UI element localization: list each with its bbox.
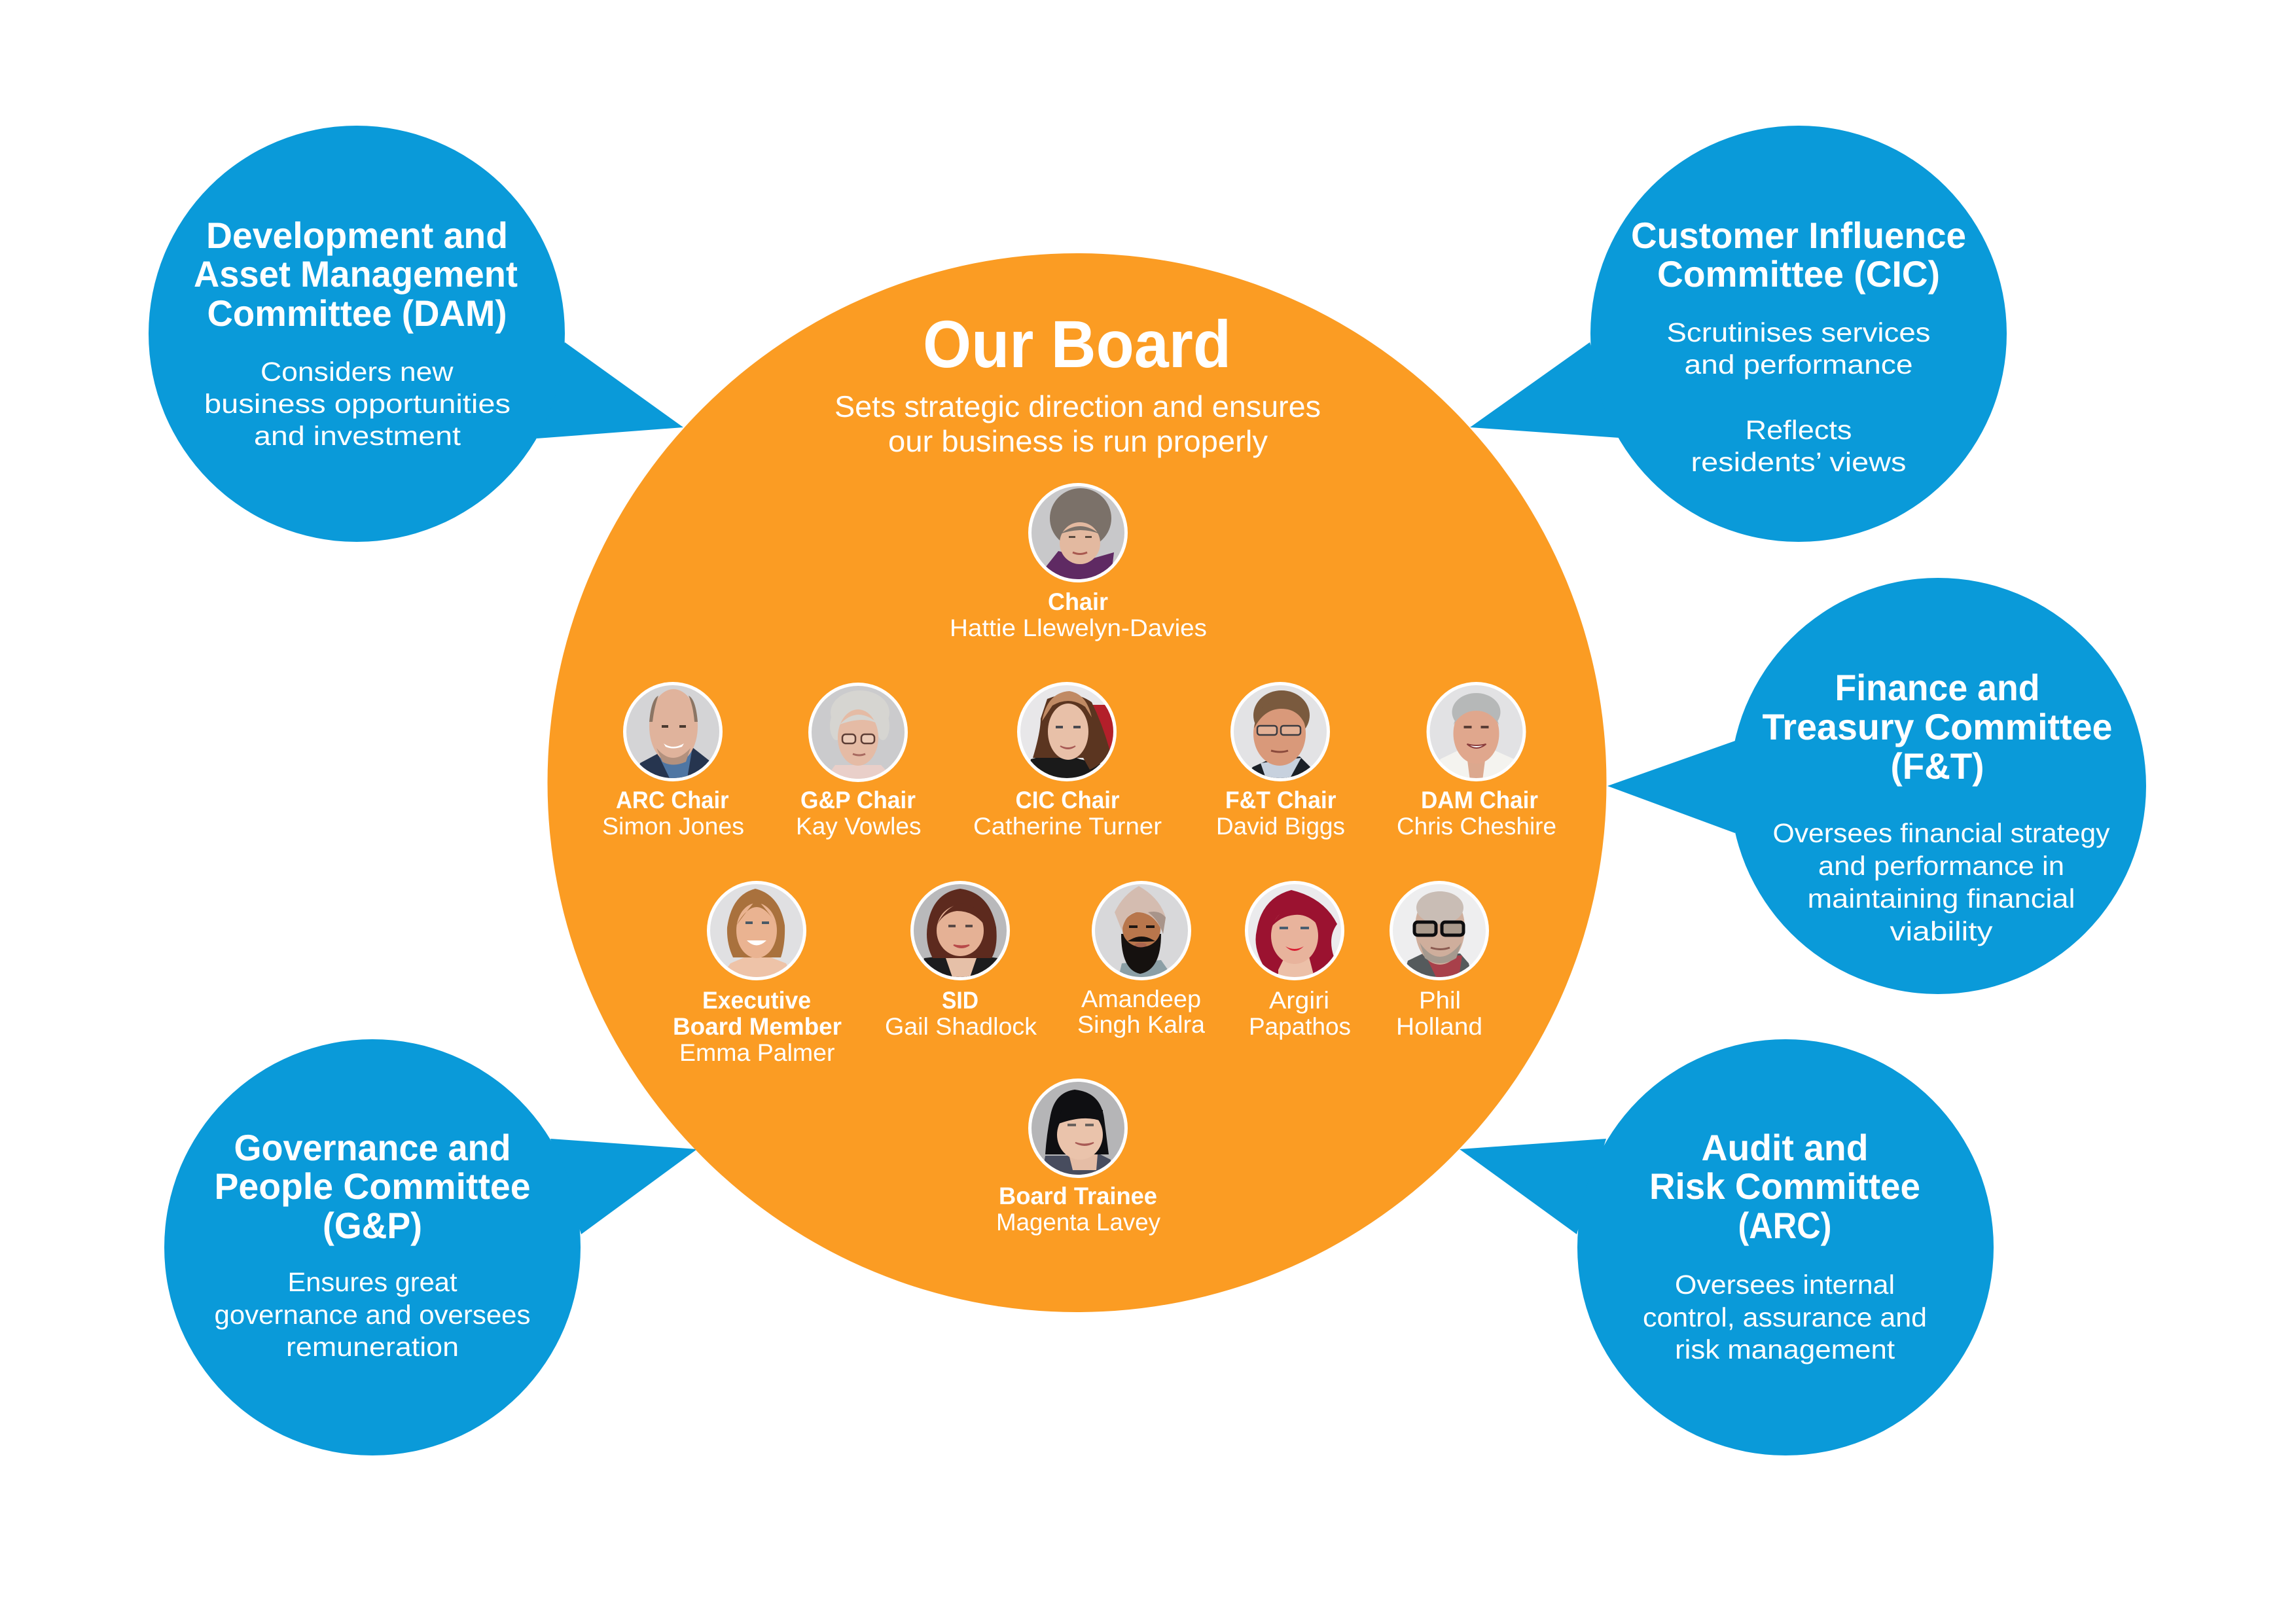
- label: G&P chair: G&P Chair: [800, 787, 916, 813]
- text: ARC description: Oversees internal: [1675, 1270, 1895, 1300]
- text: F&T description: and performance in: [1818, 851, 2064, 881]
- icon: portrait Hattie Llewelyn-Davies: [1028, 483, 1128, 582]
- text: F&T description: maintaining financial: [1808, 883, 2075, 914]
- icon: portrait Emma Palmer: [707, 881, 806, 980]
- member: CIC chair: [973, 682, 1162, 840]
- member: chair: [950, 483, 1207, 641]
- label: SID: [885, 987, 1037, 1040]
- text: F&T description: [1772, 818, 2110, 946]
- text: CIC description: [1666, 317, 1931, 477]
- label: G&P chair: Kay Vowles: [796, 813, 922, 840]
- heading: CIC: Customer Influence: [1631, 215, 1966, 256]
- member: Phil Holland: [1390, 881, 1489, 1040]
- label: ARC chair: [602, 787, 744, 840]
- text: DAM description: and investment: [254, 421, 461, 451]
- heading: G&P: People Committee: [215, 1166, 530, 1207]
- subtitle: our business is run properly: [888, 424, 1268, 458]
- panel: development and asset management committee: [149, 126, 683, 542]
- member: board trainee: [996, 1079, 1160, 1236]
- label: Argiri Papathos: [1249, 987, 1351, 1040]
- label: DAM chair: Chris Cheshire: [1397, 813, 1556, 840]
- label: chair: [950, 588, 1207, 641]
- label: executive board member: [673, 987, 842, 1066]
- heading: G&P: [215, 1127, 530, 1246]
- icon: portrait Simon Jones: [623, 682, 723, 781]
- label: F&T chair: David Biggs: [1216, 813, 1345, 840]
- heading: F&T: [1762, 667, 2113, 787]
- icon: portrait Catherine Turner: [1017, 682, 1117, 781]
- title: Our Board: [923, 307, 1231, 382]
- member: Amandeep Singh Kalra: [1077, 881, 1205, 1038]
- label: ARC chair: ARC Chair: [616, 787, 729, 813]
- icon: portrait Kay Vowles: [808, 683, 908, 782]
- text: CIC description: and performance: [1685, 349, 1912, 380]
- text: ARC description: risk management: [1675, 1334, 1895, 1364]
- label: executive board member: Emma Palmer: [679, 1039, 835, 1066]
- text: G&P description: [215, 1267, 530, 1362]
- panel: governance and people committee: [164, 1039, 697, 1455]
- label: Argiri Papathos: Argiri: [1269, 987, 1329, 1014]
- label: board trainee: Board Trainee: [999, 1183, 1157, 1209]
- heading: CIC: [1631, 215, 1966, 294]
- heading: DAM: Development and: [206, 215, 508, 256]
- text: G&P description: governance and oversees: [215, 1300, 530, 1330]
- label: executive board member: Executive: [702, 987, 811, 1014]
- text: F&T description: Oversees financial strategy: [1772, 818, 2110, 848]
- label: chair: Chair: [1048, 588, 1108, 615]
- text: DAM description: [204, 357, 511, 451]
- text: CIC description: Reflects: [1745, 415, 1852, 445]
- heading: F&T: Finance and: [1835, 667, 2039, 708]
- member: ARC chair: [602, 682, 744, 840]
- label: Argiri Papathos: Papathos: [1249, 1013, 1351, 1040]
- icon: portrait Amandeep Singh Kalra: [1092, 881, 1191, 980]
- label: Phil Holland: [1396, 987, 1482, 1040]
- label: CIC chair: Catherine Turner: [973, 813, 1162, 840]
- text: CIC description: residents’ views: [1691, 447, 1906, 477]
- heading: ARC: Risk Committee: [1649, 1166, 1920, 1207]
- icon: portrait David Biggs: [1230, 682, 1330, 781]
- subtitle: Sets strategic direction and ensures: [834, 389, 1321, 423]
- member: DAM chair: [1397, 682, 1556, 840]
- subtitle: [834, 389, 1321, 458]
- text: ARC description: [1643, 1270, 1927, 1364]
- label: DAM chair: DAM Chair: [1421, 787, 1538, 813]
- panel: our board circle: [547, 253, 1606, 1312]
- label: Phil Holland: Phil: [1419, 987, 1461, 1014]
- text: ARC description: control, assurance and: [1643, 1302, 1927, 1332]
- label: board trainee: Magenta Lavey: [996, 1209, 1160, 1236]
- member: G&P chair: [796, 683, 922, 840]
- label: chair: Hattie Llewelyn-Davies: [950, 615, 1207, 641]
- label: Amandeep Singh Kalra: [1077, 986, 1205, 1038]
- label: CIC chair: CIC Chair: [1016, 787, 1119, 813]
- text: DAM description: Considers new: [260, 357, 454, 387]
- label: CIC chair: [973, 787, 1162, 840]
- label: Amandeep Singh Kalra: Singh Kalra: [1077, 1011, 1205, 1038]
- panel: audit and risk committee: [1460, 1039, 1994, 1455]
- label: F&T chair: F&T Chair: [1225, 787, 1336, 813]
- heading: DAM: [194, 215, 518, 334]
- heading: F&T: Treasury Committee: [1762, 706, 2113, 747]
- text: G&P description: Ensures great: [288, 1267, 457, 1297]
- icon: portrait Chris Cheshire: [1427, 682, 1526, 781]
- heading: CIC: Committee (CIC): [1657, 253, 1940, 294]
- text: G&P description: remuneration: [286, 1332, 459, 1362]
- label: board trainee: [996, 1183, 1160, 1236]
- label: Amandeep Singh Kalra: Amandeep: [1081, 986, 1201, 1012]
- member: Argiri Papathos: [1245, 881, 1351, 1040]
- heading: DAM: Asset Management: [194, 253, 518, 294]
- member: SID: [885, 881, 1037, 1040]
- infographic: our board and committees: [149, 126, 2146, 1455]
- label: G&P chair: [796, 787, 922, 840]
- text: DAM description: business opportunities: [204, 389, 511, 419]
- heading: DAM: Committee (DAM): [207, 293, 507, 334]
- icon: portrait Phil Holland: [1390, 881, 1489, 980]
- label: DAM chair: [1397, 787, 1556, 840]
- label: ARC chair: Simon Jones: [602, 813, 744, 840]
- heading: ARC: Audit and: [1702, 1127, 1868, 1168]
- text: F&T description: viability: [1890, 916, 1993, 946]
- label: executive board member: Board Member: [673, 1013, 842, 1040]
- heading: ARC: (ARC): [1738, 1205, 1831, 1246]
- label: SID: Gail Shadlock: [885, 1013, 1037, 1040]
- heading: F&T: (F&T): [1890, 745, 1984, 787]
- heading: G&P: Governance and: [234, 1127, 511, 1168]
- label: F&T chair: [1216, 787, 1345, 840]
- text: CIC description: Scrutinises services: [1666, 317, 1931, 348]
- panel: customer influence committee: [1470, 126, 2007, 542]
- label: SID: SID: [942, 987, 978, 1014]
- icon: portrait Magenta Lavey: [1028, 1079, 1128, 1178]
- icon: portrait Gail Shadlock: [910, 881, 1010, 980]
- member: executive board member: [673, 881, 842, 1066]
- heading: ARC: [1649, 1127, 1920, 1246]
- member: F&T chair: [1216, 682, 1345, 840]
- heading: G&P: (G&P): [323, 1205, 422, 1246]
- panel: finance and treasury committee: [1607, 578, 2146, 994]
- label: Phil Holland: Holland: [1396, 1013, 1482, 1040]
- icon: portrait Argiri Papathos: [1245, 881, 1344, 980]
